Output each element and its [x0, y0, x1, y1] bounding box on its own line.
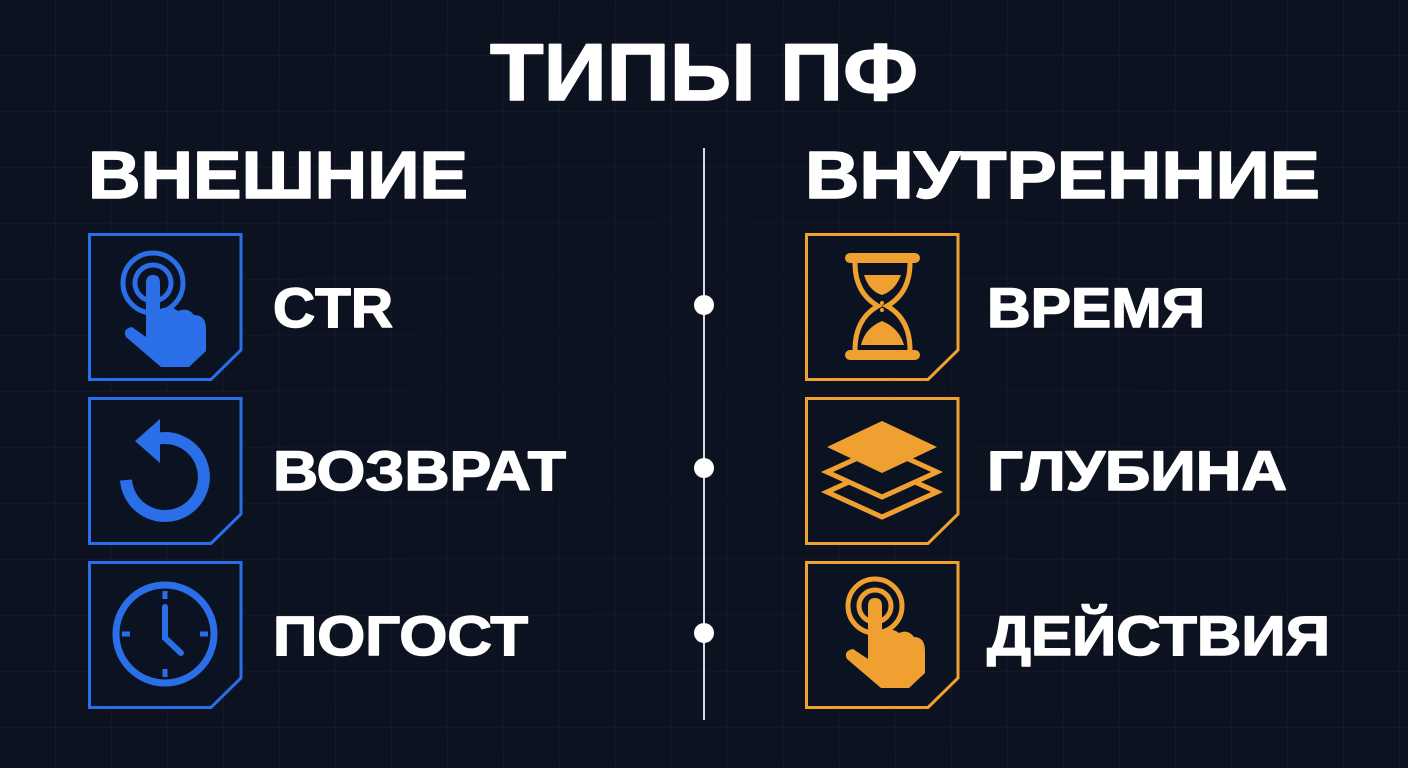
card: action hand icon — [806, 562, 958, 708]
card: layers icon — [806, 398, 958, 544]
label: CTR: CTR — [273, 276, 393, 339]
card: hourglass icon — [806, 234, 958, 380]
card: clock icon — [90, 562, 241, 708]
heading: internal: ВНУТРЕННИЕ — [805, 138, 1320, 213]
title: ТИПЫ ПФ — [490, 28, 918, 118]
card: return icon — [90, 398, 241, 544]
label: ВОЗВРАТ: ВОЗВРАТ — [273, 439, 566, 502]
label: ДЕЙСТВИЯ: ДЕЙСТВИЯ — [987, 604, 1330, 667]
heading: external: ВНЕШНИЕ — [88, 138, 468, 213]
label: ПОГОСТ: ПОГОСТ — [273, 604, 528, 667]
card: CTR icon — [90, 234, 241, 380]
divider timeline — [694, 148, 714, 720]
label: ВРЕМЯ: ВРЕМЯ — [987, 276, 1205, 339]
label: ГЛУБИНА: ГЛУБИНА — [987, 439, 1287, 502]
